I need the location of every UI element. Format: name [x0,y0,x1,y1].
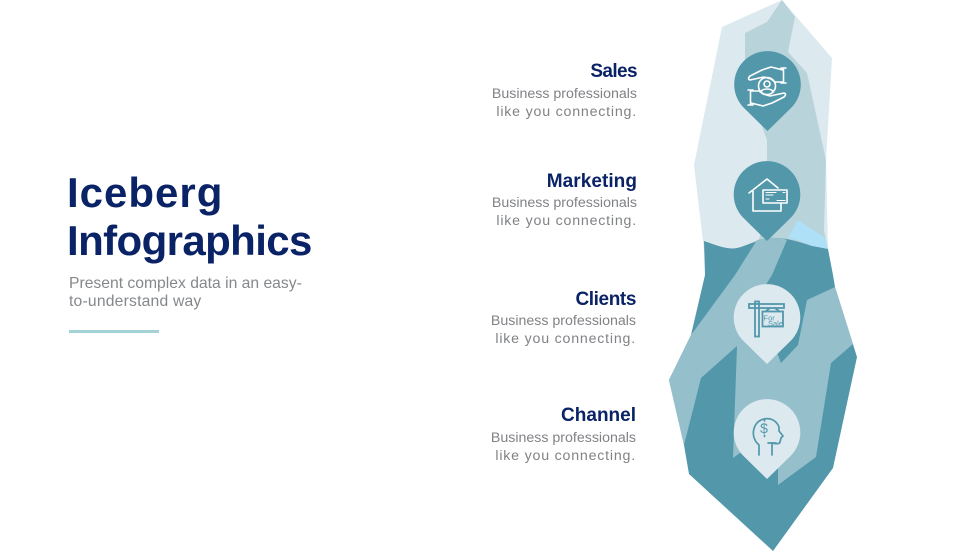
text: Marketing: like you connecting. [496,212,637,228]
item: Channel [491,405,636,464]
pin: Clients [734,284,800,364]
text: Clients [491,313,636,346]
pin: Marketing [734,161,800,241]
text: Sales [492,86,637,120]
iceberg above water [694,0,832,250]
icon: hands holding person [748,67,786,106]
iceberg below water [669,238,857,551]
pin: Channel [734,399,800,479]
subtitle: Present complex data in an easy- [69,275,302,292]
title [67,169,312,264]
item: Marketing [492,171,637,228]
icon: for sale sign: Sale [768,319,783,328]
title: Infographics [67,217,312,264]
text: Clients: Business professionals [491,313,636,329]
text: Sales: Business professionals [492,86,637,102]
text: Clients: like you connecting. [495,330,636,346]
text: Channel: Business professionals [491,430,636,446]
text: Channel [491,430,636,464]
light blue facet [788,220,828,249]
heading: Clients: Clients [575,289,636,310]
item: Clients [491,289,636,346]
text: Sales: like you connecting. [496,104,637,120]
item: Sales [492,61,637,120]
icon: head with dollar sign: $ [760,420,768,436]
heading: Sales: Sales [590,61,637,82]
accent line [69,330,159,333]
icon: for sale sign: For [764,314,775,322]
heading: Marketing: Marketing [547,171,637,192]
title: Iceberg [67,169,223,216]
subtitle [69,275,302,310]
text: Marketing: Business professionals [492,195,637,211]
text: Marketing [492,195,637,228]
heading: Channel: Channel [561,405,636,426]
pin: Sales [734,51,801,131]
icon: house with card [749,179,787,211]
icon: for sale sign [749,302,784,336]
subtitle: to-understand way [69,293,201,310]
text: Channel: like you connecting. [495,448,636,464]
